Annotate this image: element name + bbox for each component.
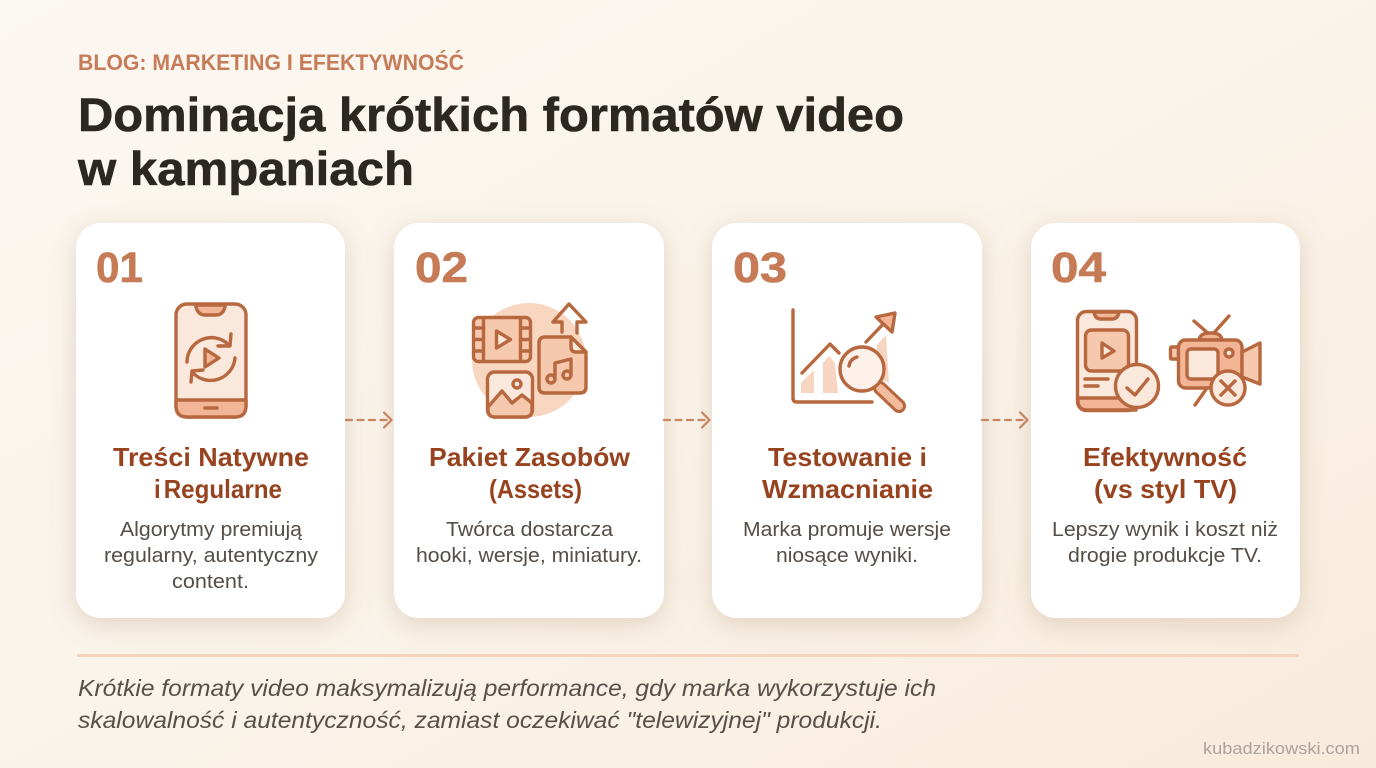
- title: w kampaniach: [77, 142, 414, 195]
- panel: step 01: [76, 223, 345, 618]
- heading: step 01: i Regularne: [154, 474, 282, 504]
- heading: step 03: Wzmacnianie: [762, 474, 933, 504]
- title: [77, 88, 904, 195]
- panel: step 04: [1031, 223, 1300, 618]
- description: step 01: regularny, autentyczny: [104, 545, 318, 567]
- icon: phone approved vs TV camera rejected: [1078, 312, 1260, 410]
- description: step 04: [1052, 519, 1278, 567]
- heading: step 04: (vs styl TV): [1094, 474, 1237, 504]
- description: step 02: hooki, wersje, miniatury.: [416, 545, 642, 567]
- heading: step 01: [113, 442, 309, 504]
- heading: step 02: (Assets): [489, 474, 582, 504]
- panel: step 02: [394, 223, 664, 618]
- step number 01: 01: [96, 244, 143, 292]
- heading: step 04: [1083, 442, 1247, 504]
- closing statement: Krótkie formaty video maksymalizują performance, gdy marka wykorzystuje ich: [78, 675, 936, 701]
- step number 03: 03: [733, 244, 787, 292]
- icon: asset pack: [472, 303, 586, 417]
- arrow: step 01 to 02: [346, 412, 392, 428]
- heading: step 03: Testowanie i: [768, 442, 927, 472]
- icon: phone with replay loop: [176, 304, 246, 417]
- heading: step 02: Pakiet Zasobów: [429, 442, 631, 472]
- description: step 01: content.: [172, 571, 249, 593]
- panel: step 03: [712, 223, 982, 618]
- step number 04: 04: [1051, 244, 1106, 292]
- heading: step 04: Efektywność: [1083, 442, 1247, 472]
- description: step 03: [743, 519, 951, 567]
- heading: step 03: [762, 442, 933, 504]
- description: step 04: drogie produkcje TV.: [1068, 545, 1262, 567]
- icon: growth chart with magnifier: [793, 310, 899, 406]
- step number 02: 02: [415, 244, 468, 292]
- eyebrow label: BLOG: MARKETING I EFEKTYWNOŚĆ: [78, 50, 464, 75]
- description: step 02: [416, 519, 642, 567]
- description: step 01: [104, 519, 318, 593]
- closing statement: skalowalność i autentyczność, zamiast oczekiwać "telewizyjnej" produkcji.: [78, 707, 882, 733]
- closing statement: [78, 675, 936, 733]
- description: step 01: Algorytmy premiują: [120, 519, 303, 541]
- watermark: kubadzikowski.com: [1203, 739, 1360, 758]
- description: step 03: niosące wyniki.: [776, 545, 918, 567]
- description: step 02: Twórca dostarcza: [446, 519, 614, 541]
- arrow: step 03 to 04: [982, 412, 1028, 428]
- arrow: step 02 to 03: [664, 412, 710, 428]
- description: step 04: Lepszy wynik i koszt niż: [1052, 519, 1278, 541]
- heading: step 01: Treści Natywne: [113, 442, 309, 472]
- heading: step 02: [429, 442, 631, 504]
- title: Dominacja krótkich formatów video: [78, 88, 904, 141]
- description: step 03: Marka promuje wersje: [743, 519, 951, 541]
